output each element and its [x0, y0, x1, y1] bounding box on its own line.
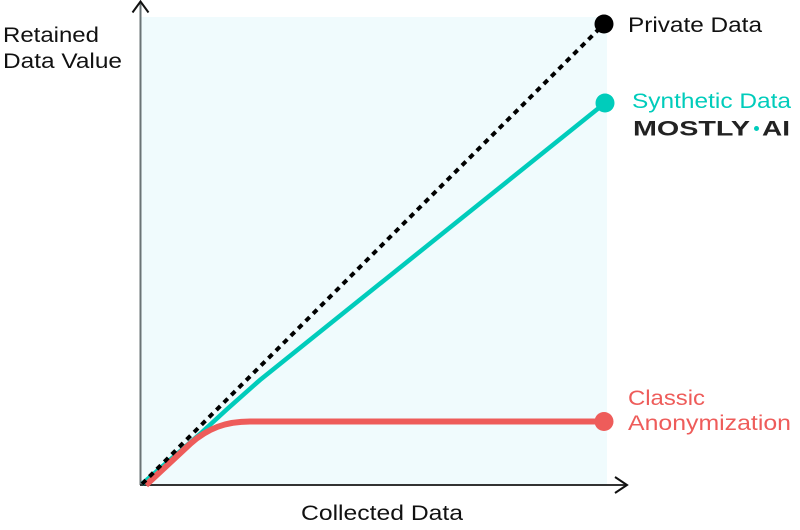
label: classic anonymization: Classic [628, 386, 705, 410]
line: synthetic data [142, 94, 614, 484]
marker: synthetic data [596, 94, 614, 112]
y axis title: Data Value [3, 49, 122, 73]
y axis title: Retained [3, 23, 99, 47]
label: classic anonymization: Anonymization [628, 411, 791, 435]
x axis title: Collected Data [301, 501, 463, 525]
label: private data: Private Data [628, 13, 762, 37]
logo: MOSTLY AI: AI [762, 118, 790, 140]
x axis arrow [140, 477, 627, 493]
logo: MOSTLY AI: MOSTLY [633, 118, 750, 140]
label: classic anonymization [628, 386, 791, 435]
marker: private data [594, 14, 614, 34]
y axis title [3, 23, 122, 73]
logo: MOSTLY AI [633, 118, 790, 140]
line: classic anonymization [146, 412, 614, 485]
y axis arrow [132, 2, 148, 485]
label: synthetic data: Synthetic Data [632, 89, 791, 113]
marker: classic anonymization [594, 412, 614, 431]
panel: chart plot background [141, 17, 607, 485]
line: private data dotted [142, 14, 614, 484]
